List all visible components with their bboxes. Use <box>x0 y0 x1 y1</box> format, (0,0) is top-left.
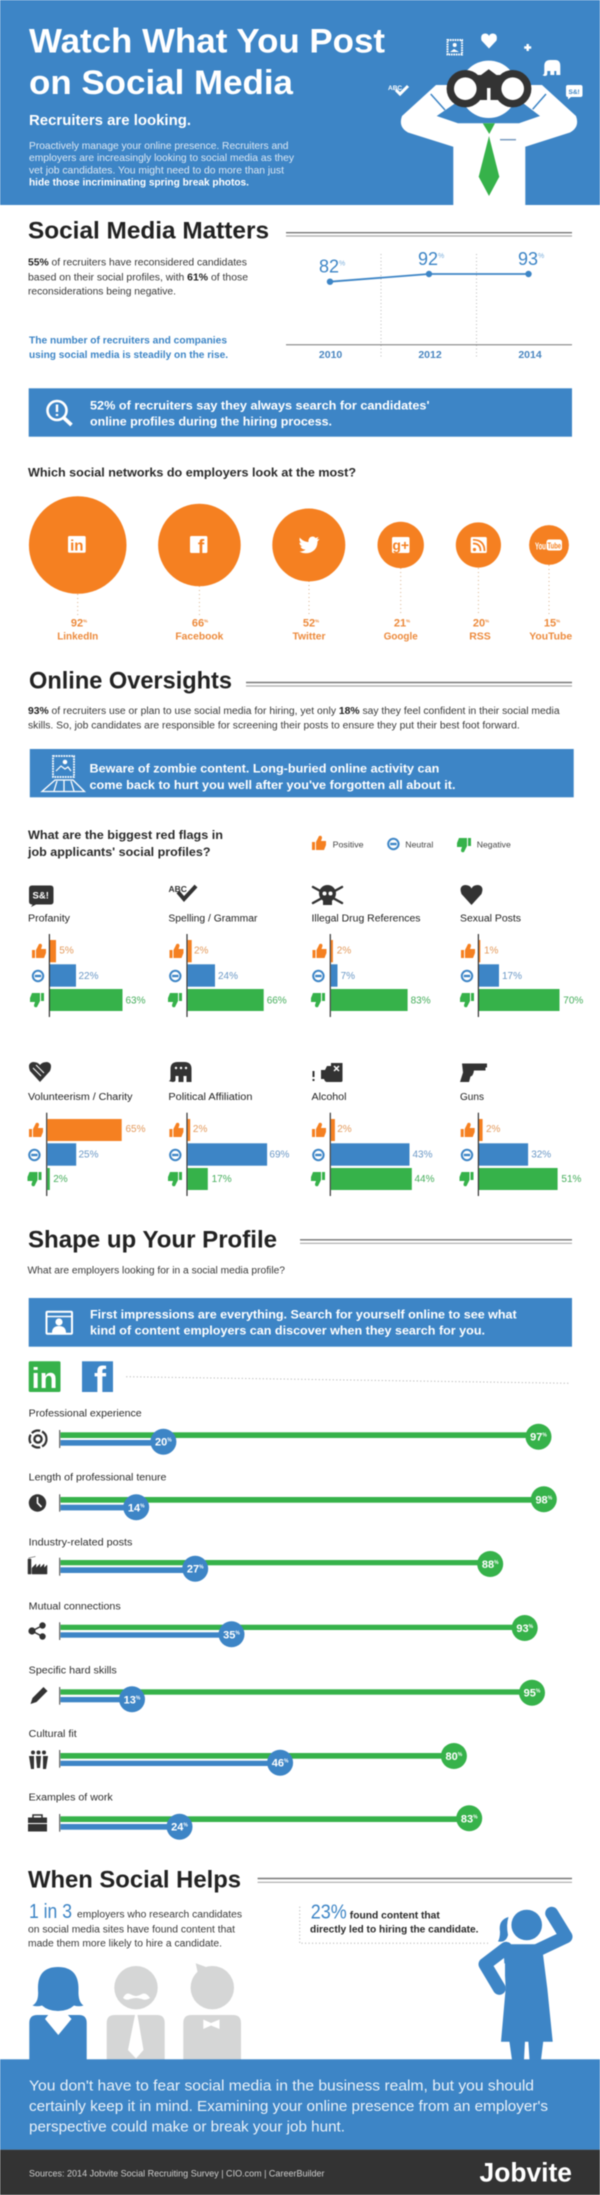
bubble labels: 21 <box>394 618 406 630</box>
row: Industry-related posts: % <box>199 1565 204 1571</box>
row: Cultural fit <box>29 1729 467 1776</box>
row: Examples of work <box>28 1793 482 1840</box>
bubble labels: 15 <box>544 618 556 630</box>
intro paragraph: vet job candidates. You might need to do more than just <box>29 165 284 176</box>
chart: Illegal Drug References: Illegal Drug References <box>312 914 420 925</box>
text block: reconsidered candidates <box>28 258 248 298</box>
chart: Profanity: 63% <box>126 995 146 1006</box>
icon: framed picture on grave <box>42 756 84 792</box>
Google bubble <box>378 522 424 568</box>
chart: Spelling / Grammar: 24% <box>218 971 238 982</box>
row: Industry-related posts: % <box>494 1560 499 1566</box>
footer: sources and logo: Jobvite <box>480 2158 572 2188</box>
header panel <box>0 0 600 205</box>
callout: 23% found content <box>300 1901 488 1943</box>
icon: hands heart <box>29 1062 51 1082</box>
footer panel: conclusion: You don't have to fear social media in the business realm, but you should <box>29 2079 534 2095</box>
footer: sources and logo <box>0 2150 600 2195</box>
chart: Spelling / Grammar <box>168 884 287 1017</box>
callout: first impressions: First impressions are everything. Search for yourself online to see what <box>90 1307 517 1321</box>
line chart: 92 <box>418 249 438 269</box>
callout: first impressions <box>29 1298 572 1347</box>
icon: speech bubble: S&! <box>568 89 580 96</box>
row: Specific hard skills: Specific hard skills <box>29 1665 117 1676</box>
chart: Alcohol: Alcohol <box>312 1092 346 1103</box>
heading: which social networks: Which social networks do employers look at the most? <box>28 467 356 480</box>
bubble labels: % <box>406 619 410 624</box>
legend: LinkedIn and Facebook: f <box>94 1359 107 1400</box>
heading: red flags <box>27 829 223 859</box>
chart: Sexual Posts <box>460 885 583 1017</box>
footer panel: conclusion: certainly keep it in mind. Examining your online presence from an employer's <box>29 2099 548 2115</box>
callout: 23% found content: directly led to hiring the candidate. <box>310 1925 479 1936</box>
text block: on the rise: The number of recruiters and companies <box>29 336 227 347</box>
chart: social network bubbles <box>0 496 600 2195</box>
chart: Alcohol: 2% <box>337 1124 352 1135</box>
row: Length of professional tenure: % <box>140 1503 145 1509</box>
icon: magnifier <box>48 401 72 425</box>
legend: Negative <box>477 839 511 849</box>
text block: oversights: 93% of recruiters use or plan to use social media for hiring, yet only 18% say they feel confident in their social media <box>28 706 560 717</box>
intro paragraph: employers are increasingly looking to social media as they <box>29 153 295 164</box>
figure: woman employer <box>29 1967 87 2061</box>
row: Industry-related posts: 27 <box>187 1564 199 1576</box>
YouTube bubble: Tube <box>548 540 561 550</box>
text: employers looking for: What are employers looking for in a social media profile? <box>28 1265 285 1276</box>
row: Mutual connections: Mutual connections <box>29 1601 121 1612</box>
row: Professional experience: 20 <box>155 1437 167 1449</box>
chart: Political Affiliation <box>168 1062 290 1196</box>
chart: Guns <box>460 1064 582 1196</box>
icon: elephant <box>542 60 560 76</box>
callout: 23% found content: found content that <box>350 1910 440 1921</box>
icon: tipped bottle <box>312 1063 342 1082</box>
intro paragraph <box>29 141 295 189</box>
text block: 1 in 3 employers <box>28 1901 242 1950</box>
icon: profile window <box>46 1312 72 1334</box>
bubble labels: LinkedIn <box>57 630 98 642</box>
text block: 1 in 3 employers: 1 in 3 <box>29 1901 72 1923</box>
chart: Illegal Drug References: 83% <box>411 995 431 1006</box>
chart: Alcohol: 44% <box>414 1174 435 1185</box>
chart: Sexual Posts: 17% <box>502 971 522 982</box>
chart: Illegal Drug References: 2% <box>337 945 351 956</box>
row: Cultural fit: Cultural fit <box>29 1729 77 1740</box>
row: Length of professional tenure: % <box>548 1495 553 1501</box>
chart: Profanity: 5% <box>59 945 74 956</box>
text block: reconsidered candidates: based on their social profiles, with 61% of those <box>28 272 248 283</box>
section heading: Online Oversights: Online Oversights <box>29 668 232 695</box>
bubble labels: 20 <box>473 618 485 630</box>
icon: heart <box>461 885 482 905</box>
YouTube bubble: You <box>535 542 546 552</box>
chart: Volunteerism / Charity <box>28 1062 146 1196</box>
chart: Profanity: 22% <box>78 971 99 982</box>
callout: 52% of recruiters <box>29 388 572 437</box>
callout: 52% of recruiters: 52% of recruiters say they always search for candidates' <box>90 398 430 412</box>
heading: red flags: What are the biggest red flags in <box>28 829 223 842</box>
callout: 23% found content: 23% <box>311 1901 347 1923</box>
row: Cultural fit: 46 <box>272 1758 284 1770</box>
chart: Profanity <box>28 886 146 1017</box>
line chart <box>286 249 572 361</box>
row: Professional experience: Professional experience <box>29 1409 142 1420</box>
row: Professional experience: % <box>167 1438 172 1444</box>
chart: Volunteerism / Charity: 25% <box>78 1150 99 1161</box>
row: Examples of work: 24 <box>171 1822 183 1834</box>
row: Mutual connections: % <box>235 1630 240 1636</box>
intro paragraph: Proactively manage your online presence. Recruiters and <box>29 141 289 152</box>
chart: Volunteerism / Charity: 65% <box>126 1124 146 1135</box>
icon: people <box>29 1750 48 1769</box>
text block: 1 in 3 employers: made them more likely to hire a candidate. <box>28 1939 222 1950</box>
section heading: When Social Helps: When Social Helps <box>28 1867 241 1894</box>
icon: spelling check <box>388 85 408 94</box>
chart: Guns: Guns <box>460 1092 484 1103</box>
icon: briefcase <box>28 1815 47 1832</box>
chart: Guns: 32% <box>531 1150 551 1161</box>
row: Examples of work: 83 <box>461 1813 473 1825</box>
chart: Sexual Posts: 1% <box>484 945 499 956</box>
chart: Sexual Posts: Sexual Posts <box>460 914 521 925</box>
YouTube bubble <box>529 525 569 565</box>
callout: 52% of recruiters: online profiles during the hiring process. <box>90 415 332 429</box>
line chart: 82 <box>319 257 339 277</box>
title: on Social Media <box>29 64 294 102</box>
intro paragraph: hide those incriminating spring break photos. <box>29 178 249 189</box>
line chart: % <box>538 253 544 260</box>
bubble labels: 52 <box>303 618 315 630</box>
icon: spelling check: ABC <box>388 85 402 92</box>
line chart: % <box>438 253 444 260</box>
section heading: Shape up Your Profile: Shape up Your Profile <box>28 1227 277 1254</box>
bubble labels: Twitter <box>292 630 326 642</box>
row: Length of professional tenure <box>29 1473 557 1520</box>
row: Cultural fit: 80 <box>446 1751 458 1763</box>
figure: woman looking <box>485 1910 566 2060</box>
row: Examples of work: Examples of work <box>29 1793 114 1804</box>
Twitter bubble <box>272 508 345 582</box>
row: Mutual connections: % <box>529 1624 534 1630</box>
text block: reconsidered candidates: reconsiderations being negative. <box>28 287 176 298</box>
legend <box>312 836 511 852</box>
icon: elephant <box>168 1062 192 1082</box>
title <box>29 22 386 102</box>
line chart: 2012 <box>418 349 442 361</box>
chart: Spelling / Grammar: 2% <box>194 945 209 956</box>
Facebook bubble: f <box>198 537 205 558</box>
row: Specific hard skills: 95 <box>524 1688 536 1700</box>
row: Industry-related posts: Industry-related posts <box>29 1538 132 1549</box>
line chart: 93 <box>518 249 538 269</box>
legend: LinkedIn and Facebook: in <box>32 1363 57 1395</box>
LinkedIn bubble <box>29 496 127 594</box>
row: Specific hard skills: % <box>536 1689 541 1695</box>
text block: 1 in 3 employers: on social media sites have found content that <box>28 1924 235 1935</box>
bubble labels: RSS <box>469 630 491 642</box>
icon: heart <box>481 34 497 48</box>
line chart: 2014 <box>518 349 542 361</box>
bubble labels: 92 <box>71 618 83 630</box>
icon: factory <box>28 1556 47 1574</box>
row: Examples of work: % <box>183 1823 188 1829</box>
row: Length of professional tenure: 14 <box>128 1502 140 1514</box>
row: Specific hard skills: % <box>136 1695 141 1701</box>
text block: oversights: skills. So, job candidates are responsible for screening their posts to ensure they put their best foot forward. <box>28 720 520 731</box>
illustration: recruiter with binoculars <box>401 61 577 205</box>
chart: Spelling / Grammar: 66% <box>267 995 287 1006</box>
row: Specific hard skills: 13 <box>124 1694 136 1706</box>
chart: Illegal Drug References <box>311 885 431 1017</box>
callout: zombie content: Beware of zombie content. Long-buried online activity can <box>90 762 439 776</box>
chart: Alcohol <box>311 1063 435 1196</box>
RSS bubble <box>456 522 501 568</box>
icon: plus <box>524 44 531 51</box>
footer: sources and logo: Sources: 2014 Jobvite Social Recruiting Survey | CIO.com | CareerBuilder <box>29 2169 324 2180</box>
bubble labels <box>57 618 572 642</box>
chart: Spelling / Grammar: Spelling / Grammar <box>168 914 258 925</box>
chart: Guns: 2% <box>486 1124 501 1135</box>
legend: LinkedIn and Facebook <box>29 1359 570 1400</box>
row: Industry-related posts: 88 <box>482 1559 494 1571</box>
row: Industry-related posts <box>28 1538 503 1582</box>
bubble labels: Facebook <box>175 630 224 642</box>
footer panel: conclusion: perspective could make or break your job hunt. <box>29 2120 345 2136</box>
legend: Neutral <box>405 839 433 849</box>
chart: Alcohol: 43% <box>412 1150 433 1161</box>
figure: man with bow tie <box>183 1963 241 2060</box>
text block: on the rise <box>29 336 228 361</box>
icon: handgun <box>460 1064 487 1082</box>
heading: red flags: job applicants' social profiles? <box>27 846 211 859</box>
row: Professional experience <box>29 1409 551 1455</box>
legend: Positive <box>333 839 364 849</box>
text block: 1 in 3 employers: employers who research candidates <box>77 1910 242 1921</box>
figure: man with mustache <box>107 1966 165 2060</box>
row: Length of professional tenure: 98 <box>535 1494 548 1506</box>
row: Length of professional tenure: Length of professional tenure <box>29 1473 167 1484</box>
icon: speech bubble <box>566 85 582 100</box>
row: Cultural fit: % <box>284 1759 289 1765</box>
icon: stamp <box>448 40 462 54</box>
callout: zombie content: come back to hurt you well after you've forgotten all about it. <box>90 778 456 792</box>
bubble labels: % <box>83 619 87 624</box>
chart: Volunteerism / Charity: Volunteerism / Charity <box>28 1092 132 1103</box>
row: Examples of work: % <box>473 1814 478 1820</box>
bubble labels: YouTube <box>529 630 572 642</box>
row: Professional experience: % <box>542 1433 547 1439</box>
chart: Political Affiliation: 2% <box>193 1124 207 1135</box>
chart: Political Affiliation: 17% <box>212 1174 232 1185</box>
row: Cultural fit: % <box>458 1752 463 1758</box>
bubble labels: % <box>315 619 319 624</box>
chart: Political Affiliation: 69% <box>269 1150 290 1161</box>
title: Watch What You Post <box>29 22 386 60</box>
icon: pencil <box>30 1687 48 1704</box>
callout: first impressions: kind of content employers can discover when they search for you. <box>90 1324 485 1338</box>
subtitle: Recruiters are looking. <box>29 113 191 129</box>
callout: zombie content <box>30 749 574 797</box>
icon: gear <box>30 1430 46 1448</box>
row: Mutual connections: 93 <box>516 1623 529 1635</box>
line chart: % <box>339 261 345 268</box>
chart: Sexual Posts: 70% <box>563 995 583 1006</box>
bubble labels: % <box>556 619 560 624</box>
bubble labels: 66 <box>192 618 204 630</box>
chart: Guns: 51% <box>561 1174 582 1185</box>
text block: oversights <box>28 706 560 731</box>
icon: share <box>28 1622 46 1640</box>
icon: clock <box>29 1494 46 1512</box>
bubble labels: % <box>204 619 208 624</box>
text block: on the rise: using social media is steadily on the rise. <box>29 350 228 361</box>
row: Specific hard skills <box>29 1665 545 1712</box>
Google bubble: g+ <box>392 537 409 553</box>
chart: Political Affiliation: Political Affiliation <box>168 1092 252 1103</box>
chart: Volunteerism / Charity: 2% <box>53 1174 68 1185</box>
chart: Illegal Drug References: 7% <box>341 971 355 982</box>
LinkedIn bubble: in <box>70 538 83 554</box>
row: Professional experience: 97 <box>530 1432 542 1444</box>
section heading: Social Media Matters: Social Media Matters <box>28 218 269 245</box>
icon: ABC check: ABC <box>168 884 187 894</box>
chart: Profanity: Profanity <box>28 914 70 925</box>
bubble labels: % <box>485 619 489 624</box>
icon: speech bubble: S&! <box>32 890 49 902</box>
bubble labels: Google <box>384 630 418 642</box>
row: Mutual connections: 35 <box>223 1629 235 1641</box>
row: Mutual connections <box>28 1601 538 1647</box>
footer panel: conclusion <box>0 2059 600 2150</box>
icon: skull and crossbones <box>313 885 342 905</box>
Facebook bubble <box>158 504 241 586</box>
line chart: 2010 <box>319 349 342 361</box>
text block: reconsidered candidates: 55% of recruiters have reconsidered candidates <box>28 258 247 269</box>
